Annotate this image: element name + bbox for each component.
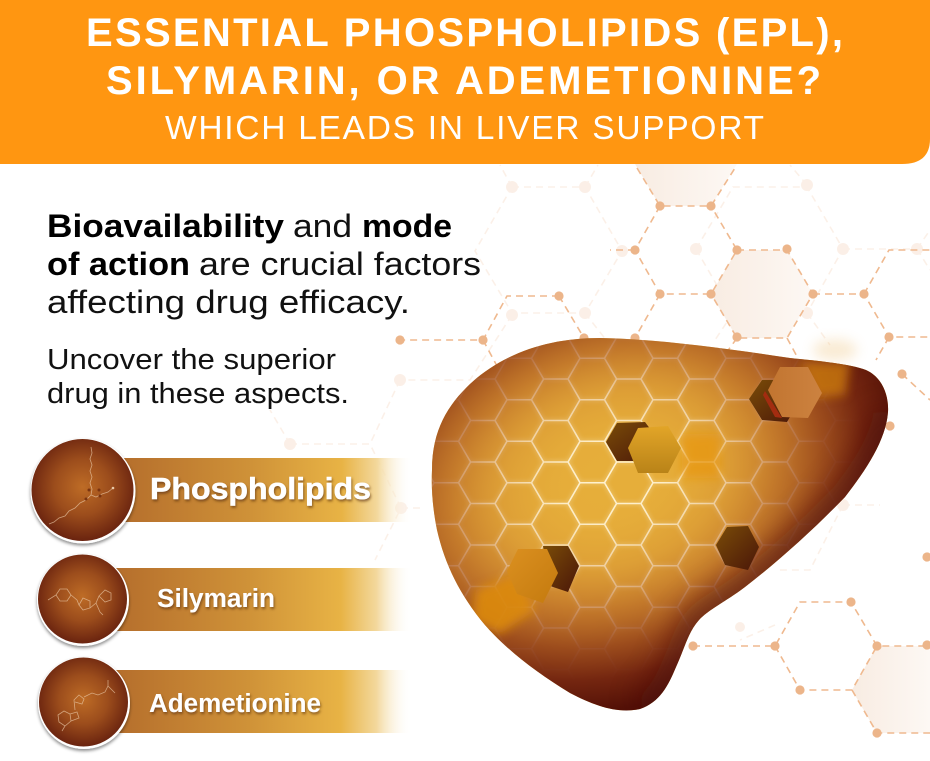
streak: upper right <box>800 362 850 398</box>
icon: ademetionine molecule <box>58 680 115 731</box>
hole: upper right <box>749 380 800 422</box>
item: Silymarin <box>37 554 412 646</box>
liver illustration <box>432 334 888 710</box>
item: Ademetionine <box>38 657 412 749</box>
text: Phospholipids: Phospholipids <box>150 471 371 506</box>
honeycomb cells <box>432 338 888 710</box>
text: Silymarin: Silymarin <box>157 585 275 613</box>
intro statement: are crucial factors <box>199 246 481 282</box>
displaced hexagon: centre <box>628 426 681 473</box>
hole: centre <box>606 422 660 461</box>
icon: silymarin molecule <box>48 589 111 615</box>
intro statement: affecting drug efficacy. <box>47 284 410 320</box>
background hexagon network <box>270 164 930 738</box>
icon: phospholipid molecule <box>49 447 114 524</box>
title line 1: ESSENTIAL PHOSPHOLIPIDS (EPL), <box>86 11 843 55</box>
streak: lower left <box>472 572 535 634</box>
intro statement <box>47 208 481 320</box>
supporting text: Uncover the superior <box>47 344 336 376</box>
hole: lower left <box>543 546 579 592</box>
displaced hexagon: lower left <box>507 549 558 603</box>
subtitle: WHICH LEADS IN LIVER SUPPORT <box>165 110 764 147</box>
supporting text: drug in these aspects. <box>47 378 349 410</box>
item: Phospholipids <box>30 438 412 544</box>
displaced hexagon: upper right <box>768 367 822 418</box>
header banner <box>0 0 930 164</box>
supporting text <box>47 344 349 410</box>
intro statement: of action <box>47 246 190 282</box>
intro statement: mode <box>362 208 452 244</box>
text: Ademetionine: Ademetionine <box>149 690 321 718</box>
streak: centre <box>682 434 720 478</box>
hole: lower right <box>716 526 759 570</box>
intro statement: Bioavailability <box>47 208 284 244</box>
intro statement: and <box>293 208 352 244</box>
title line 2: SILYMARIN, OR ADEMETIONINE? <box>106 59 821 103</box>
